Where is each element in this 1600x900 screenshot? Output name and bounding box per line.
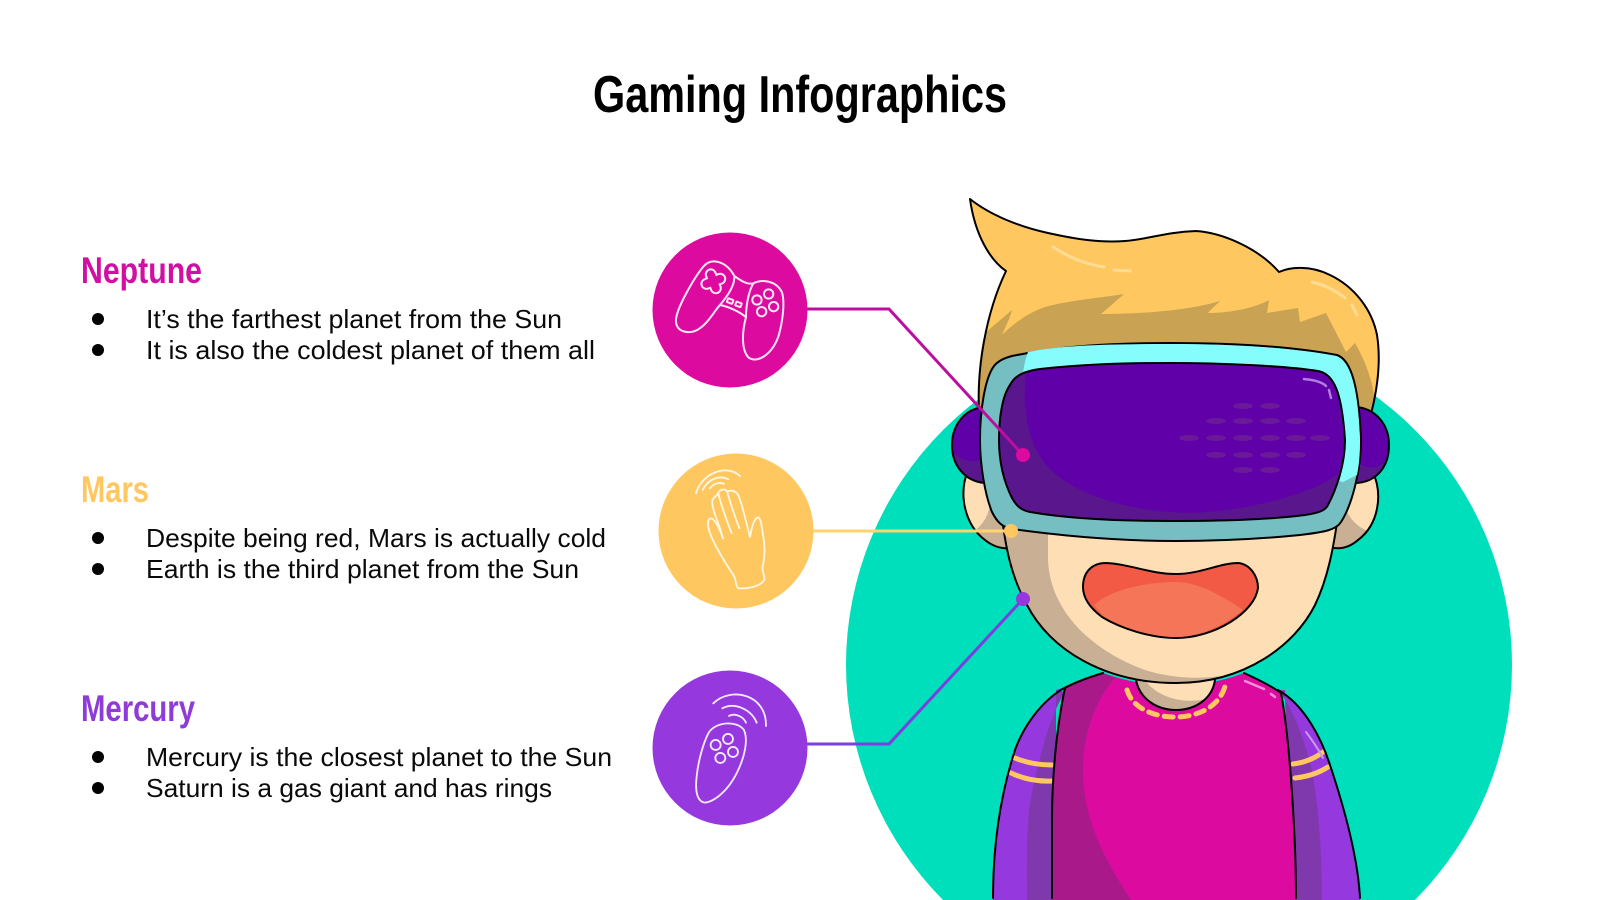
icon: motion remote in purple circle (652, 670, 808, 826)
bullet list: Mars (92, 523, 606, 584)
connector: Mars (813, 524, 1018, 538)
title: Gaming Infographics (593, 66, 1007, 124)
collar stitching (1127, 682, 1226, 717)
headset screen outline (999, 363, 1345, 521)
bullet list: Mercury: Mercury is the closest planet to the Sun (146, 742, 612, 772)
bullet list: Mars: Despite being red, Mars is actually cold (146, 523, 606, 553)
heading: Neptune: Neptune (81, 250, 202, 291)
right ear (1325, 470, 1378, 548)
icon: gamepad in pink circle (652, 232, 808, 388)
heading: Mars: Mars (81, 469, 149, 510)
bullet list: Neptune: It is also the coldest planet of them all (146, 335, 595, 365)
bullet list: Neptune (92, 304, 595, 365)
illustration: boy wearing VR headset (952, 199, 1389, 900)
shirt torso (1052, 673, 1296, 900)
right sleeve (1278, 690, 1360, 900)
mouth (1083, 563, 1258, 638)
VR headset (980, 343, 1361, 541)
shirt highlight (1245, 681, 1275, 697)
headset lit frame (1022, 344, 1360, 482)
panel: Mercury text (81, 688, 612, 803)
panel: Neptune text (81, 250, 595, 365)
headset frame (980, 343, 1361, 541)
neck (1136, 680, 1215, 710)
bullet list: Neptune: It’s the farthest planet from the Sun (146, 304, 562, 334)
bullet list: Mercury (92, 742, 612, 803)
headset screen light area (1025, 363, 1345, 513)
bullet list: Mercury: Saturn is a gas giant and has rings (146, 773, 552, 803)
panel: Mars text (81, 469, 606, 584)
headset screen (999, 363, 1345, 521)
right ear muff (1352, 407, 1389, 483)
headset speaker dots (1179, 403, 1330, 473)
teal background circle (846, 332, 1512, 900)
connector: Mercury (807, 592, 1030, 744)
headset screen highlight (1304, 379, 1331, 398)
hair (970, 199, 1379, 480)
icon: waving hand in yellow circle (658, 454, 814, 608)
left ear (963, 470, 1020, 548)
connector: Neptune (807, 309, 1030, 462)
left ear muff (952, 407, 990, 483)
heading: Mercury: Mercury (81, 688, 195, 729)
face (1000, 500, 1340, 683)
bullet list: Mars: Earth is the third planet from the Sun (146, 554, 579, 584)
left sleeve (993, 686, 1068, 900)
